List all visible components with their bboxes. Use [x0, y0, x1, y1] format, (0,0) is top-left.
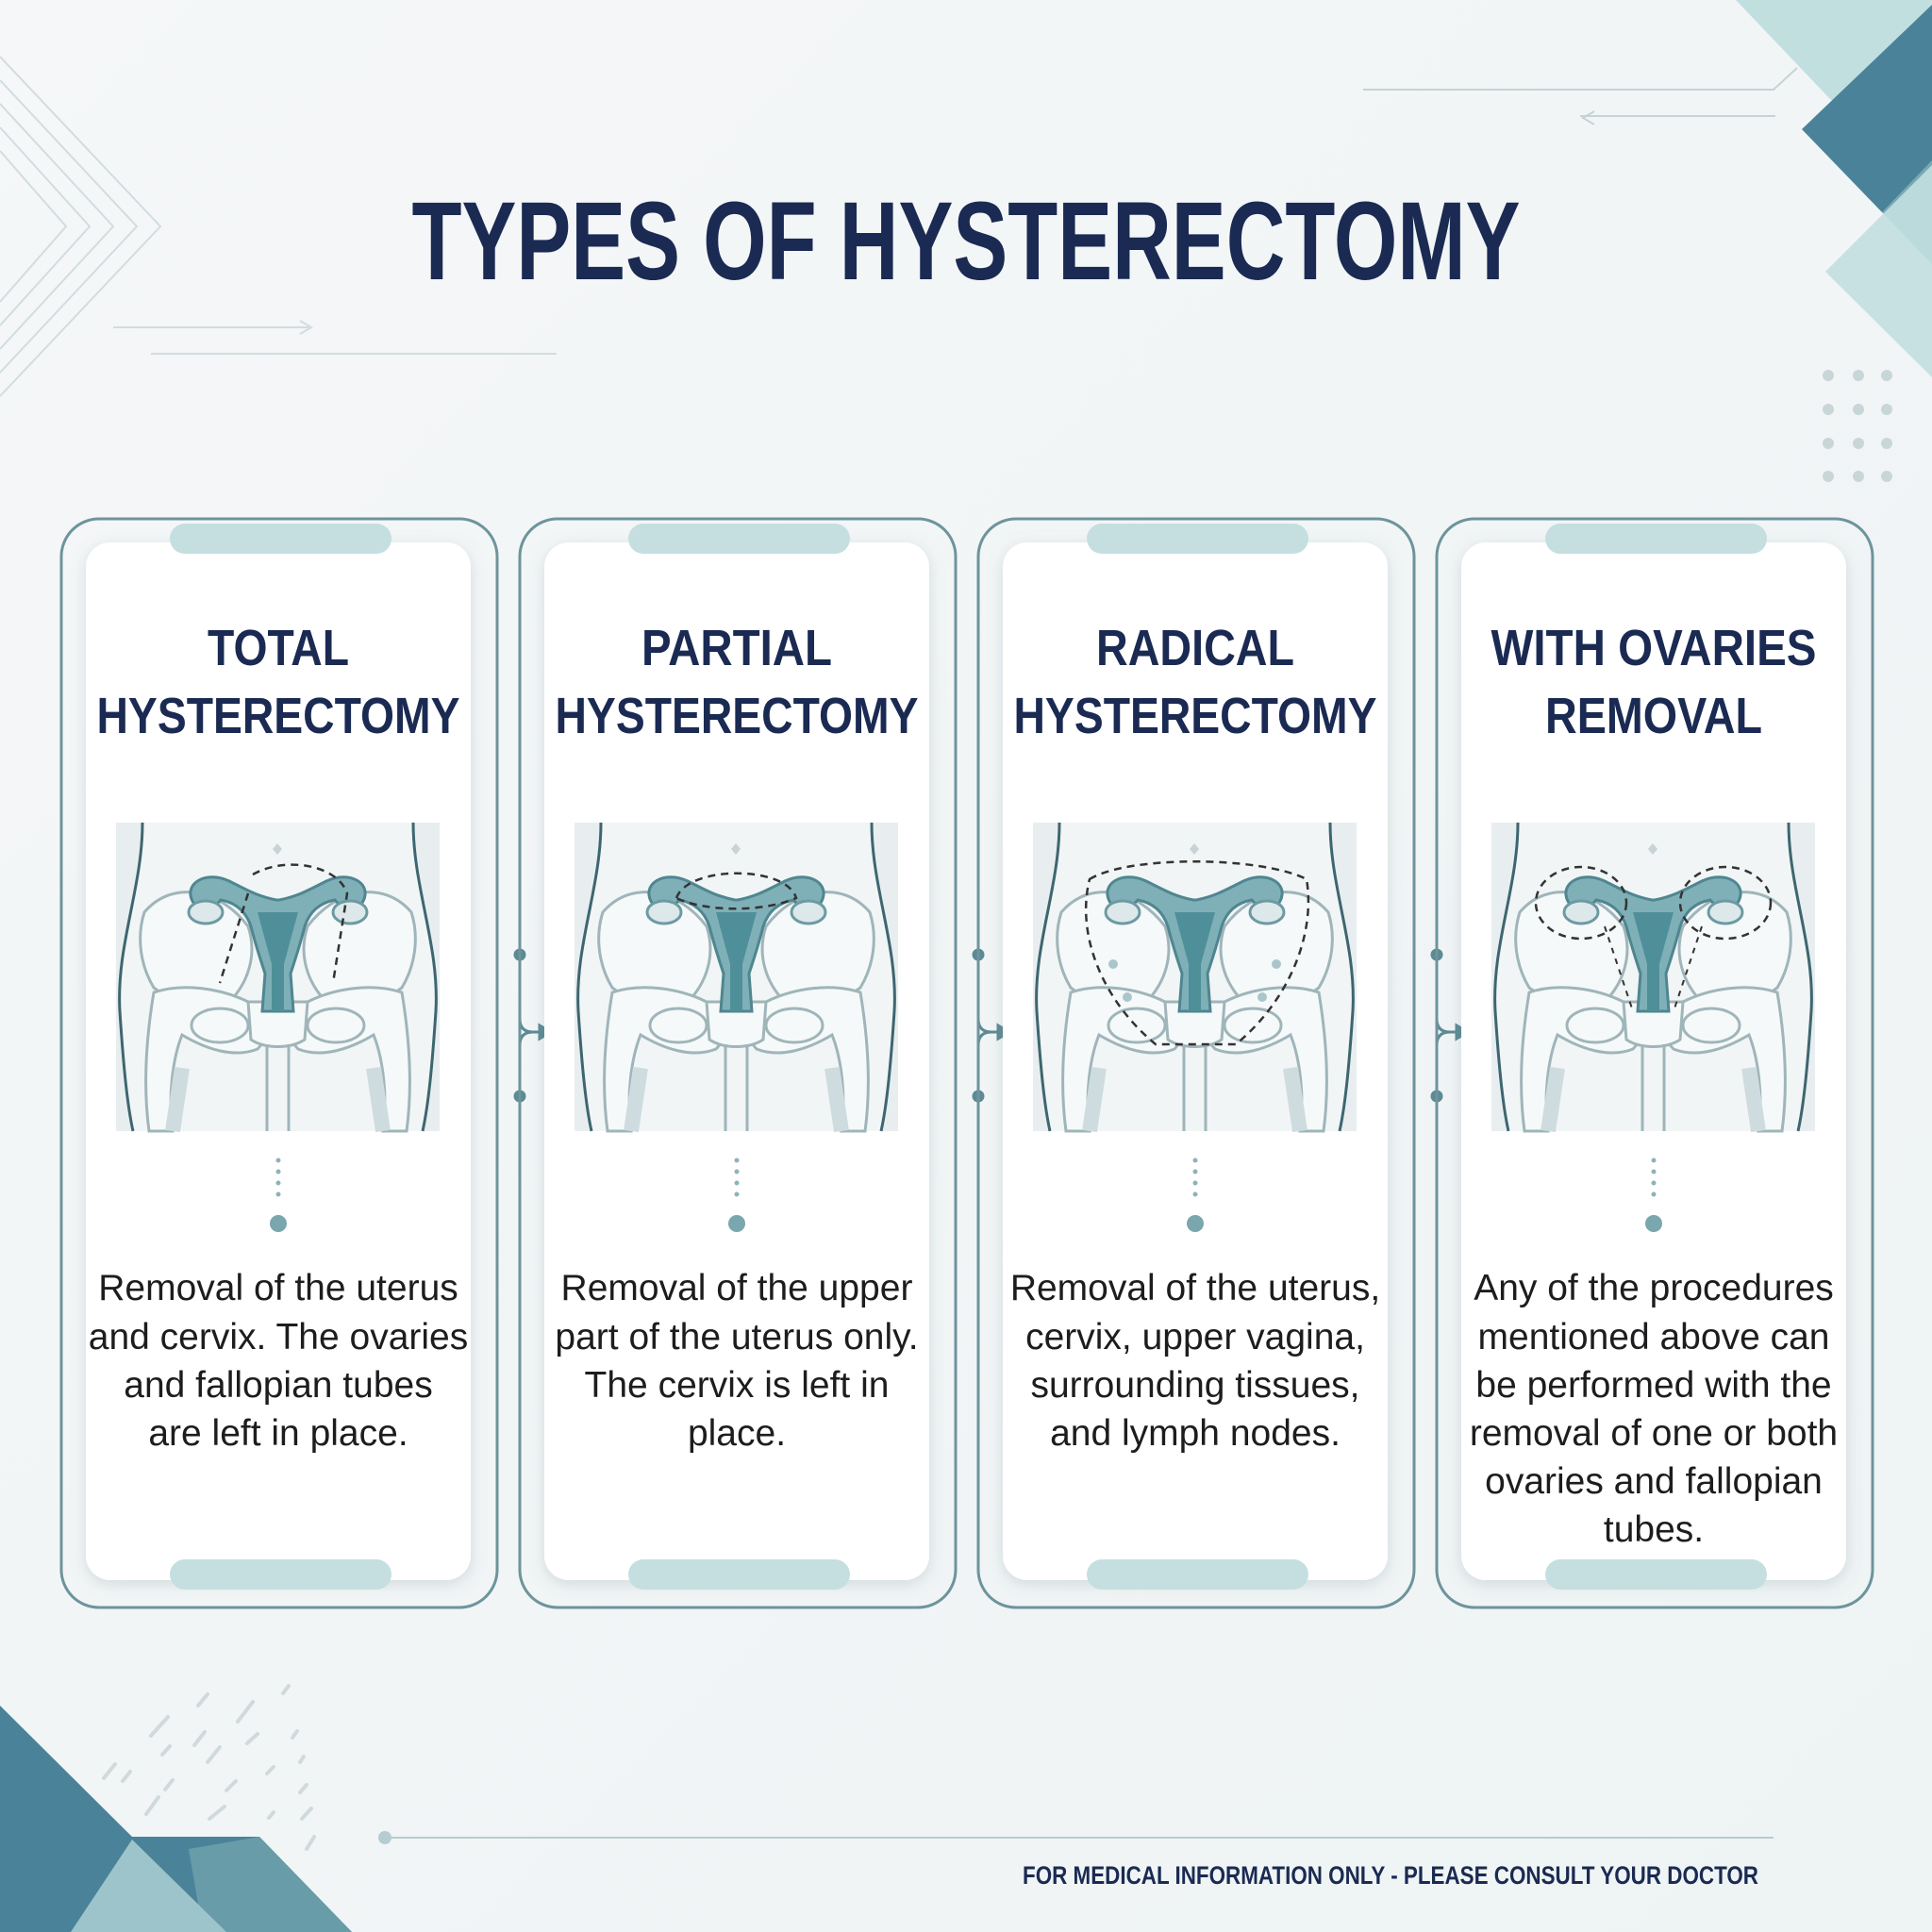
- dotted connector: [1187, 1158, 1204, 1232]
- heading: PARTIAL: [641, 620, 832, 676]
- footer disclaimer: FOR MEDICAL INFORMATION ONLY - PLEASE CONSULT YOUR DOCTOR: [1023, 1861, 1758, 1890]
- description: [1010, 1268, 1380, 1454]
- dotted connector: [270, 1158, 287, 1232]
- description: surrounding tissues,: [1030, 1365, 1360, 1406]
- heading: HYSTERECTOMY: [1013, 688, 1377, 744]
- description: [555, 1268, 919, 1454]
- description: Removal of the uterus,: [1010, 1268, 1380, 1308]
- description: and cervix. The ovaries: [89, 1317, 468, 1357]
- description: Removal of the uterus: [98, 1268, 458, 1308]
- description: place.: [688, 1413, 786, 1454]
- description: Removal of the upper: [561, 1268, 912, 1308]
- description: are left in place.: [148, 1413, 408, 1454]
- footer line: [378, 1831, 1774, 1844]
- heading: [96, 620, 460, 744]
- description: [89, 1268, 468, 1454]
- description: and lymph nodes.: [1050, 1413, 1341, 1454]
- description: and fallopian tubes: [124, 1365, 433, 1406]
- decoration: left chevrons and lines: [0, 57, 557, 396]
- decoration: top-right shapes: [1363, 0, 1932, 482]
- illustration: [1491, 823, 1815, 1131]
- arrow 3: [1432, 950, 1468, 1101]
- panel: partial hysterectomy: [520, 519, 956, 1607]
- arrow 2: [974, 950, 1009, 1101]
- illustration: [575, 823, 898, 1131]
- title: TYPES OF HYSTERECTOMY: [411, 179, 1521, 304]
- panel: with ovaries removal: [1437, 519, 1873, 1607]
- description: Any of the procedures: [1474, 1268, 1834, 1308]
- description: part of the uterus only.: [555, 1317, 919, 1357]
- description: tubes.: [1604, 1509, 1704, 1550]
- description: mentioned above can: [1478, 1317, 1829, 1357]
- panel: radical hysterectomy: [978, 519, 1414, 1607]
- description: be performed with the: [1475, 1365, 1832, 1406]
- heading: RADICAL: [1096, 620, 1294, 676]
- arrow 1: [515, 950, 551, 1101]
- dotted connector: [1645, 1158, 1662, 1232]
- decoration: bottom-left shapes: [0, 1686, 352, 1932]
- description: removal of one or both: [1470, 1413, 1838, 1454]
- heading: HYSTERECTOMY: [96, 688, 460, 744]
- heading: [1013, 620, 1377, 744]
- description: [1470, 1268, 1838, 1550]
- heading: REMOVAL: [1545, 688, 1762, 744]
- heading: TOTAL: [208, 620, 349, 676]
- dotted connector: [728, 1158, 745, 1232]
- description: ovaries and fallopian: [1485, 1461, 1823, 1502]
- illustration: [1033, 823, 1357, 1131]
- illustration: [116, 823, 440, 1131]
- description: The cervix is left in: [585, 1365, 889, 1406]
- panel: total hysterectomy: [61, 519, 497, 1607]
- description: cervix, upper vagina,: [1025, 1317, 1365, 1357]
- heading: [1491, 620, 1817, 744]
- heading: [555, 620, 919, 744]
- heading: WITH OVARIES: [1491, 620, 1817, 676]
- heading: HYSTERECTOMY: [555, 688, 919, 744]
